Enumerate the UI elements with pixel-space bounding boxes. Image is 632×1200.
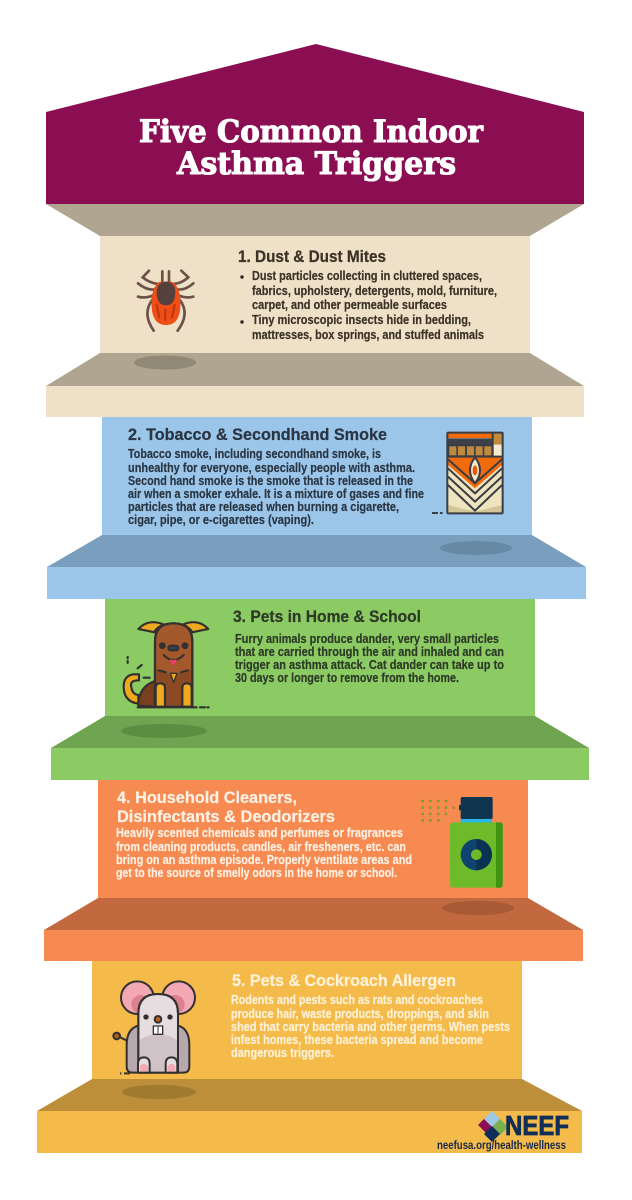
icon: spray bottle [421, 797, 503, 888]
icon: tick [138, 271, 193, 331]
body text: household cleaners: from cleaning products, candles, air fresheners, etc. can [116, 840, 406, 854]
body text: tobacco: Tobacco smoke, including secondhand smoke, is [128, 447, 381, 461]
icon: mouse [113, 981, 195, 1073]
body text: pets: trigger an asthma attack. Cat dander can take up to [235, 658, 504, 672]
title [139, 114, 484, 182]
body text: pets: Furry animals produce dander, very small particles [235, 632, 499, 646]
icon: dog [124, 622, 209, 707]
icon: cigarette pack [432, 433, 503, 513]
body text: pests: dangerous triggers. [231, 1046, 334, 1060]
panel: dust and dust mites [46, 204, 584, 417]
bullet list: dust: fabrics, upholstery, detergents, mold, furniture, [252, 284, 497, 298]
logo: NEEF: neefusa.org/health-wellness [437, 1140, 566, 1152]
bullet list: dust: carpet, and other permeable surfaces [252, 298, 447, 312]
panel: tobacco and secondhand smoke [47, 417, 586, 599]
body text: tobacco: Second hand smoke is the smoke that is released in the [128, 474, 413, 488]
body text: tobacco: cigar, pipe, or e-cigarettes (vaping). [128, 513, 314, 527]
logo: NEEF [437, 1110, 569, 1152]
body text: pests: shed that carry bacteria and other germs. When pests [231, 1020, 510, 1034]
heading: household cleaners [117, 788, 335, 826]
body text: household cleaners [116, 826, 412, 880]
body text: pests: infest homes, these bacteria spread and become [231, 1033, 483, 1047]
body text: pests: produce hair, waste products, droppings, and skin [231, 1007, 489, 1021]
body text: pests [231, 993, 510, 1060]
panel: pests and cockroach allergen [37, 961, 582, 1153]
heading: pets: 3. Pets in Home & School [233, 607, 421, 626]
heading: tobacco: 2. Tobacco & Secondhand Smoke [128, 425, 387, 444]
logo: NEEF: NEEF [505, 1110, 569, 1141]
title: Asthma Triggers [176, 146, 456, 182]
body text: pests: Rodents and pests such as rats and cockroaches [231, 993, 483, 1007]
body text: tobacco: unhealthy for everyone, especially people with asthma. [128, 461, 415, 475]
bullet list: dust [240, 269, 497, 342]
bullet list: dust: Tiny microscopic insects hide in bedding, [252, 313, 471, 327]
body text: household cleaners: get to the source of smelly odors in the home or school. [116, 866, 397, 880]
body text: pets [235, 632, 504, 685]
body text: tobacco: air when a smoker exhale. It is a mixture of gases and fine [128, 487, 424, 501]
roof header [46, 44, 584, 204]
body text: pets: 30 days or longer to remove from the home. [235, 671, 459, 685]
panel: pets in home and school [51, 599, 589, 780]
body text: household cleaners: Heavily scented chemicals and perfumes or fragrances [116, 826, 403, 840]
body text: tobacco [128, 447, 424, 527]
heading: dust and dust mites: 1. Dust & Dust Mites [238, 247, 386, 266]
body text: pets: that are carried through the air and inhaled and can [235, 645, 504, 659]
heading: pests: 5. Pets & Cockroach Allergen [232, 971, 456, 990]
body text: household cleaners: bring on an asthma episode. Properly ventilate areas and [116, 853, 412, 867]
bullet list: dust: Dust particles collecting in cluttered spaces, [252, 269, 482, 283]
bullet list: dust: mattresses, box springs, and stuffed animals [252, 328, 484, 342]
title: Five Common Indoor [139, 114, 484, 150]
heading: household cleaners: Disinfectants & Deodorizers [117, 807, 335, 826]
panel: household cleaners [44, 780, 583, 961]
body text: tobacco: particles that are released when burning a cigarette, [128, 500, 399, 514]
heading: household cleaners: 4. Household Cleaners, [117, 788, 297, 807]
